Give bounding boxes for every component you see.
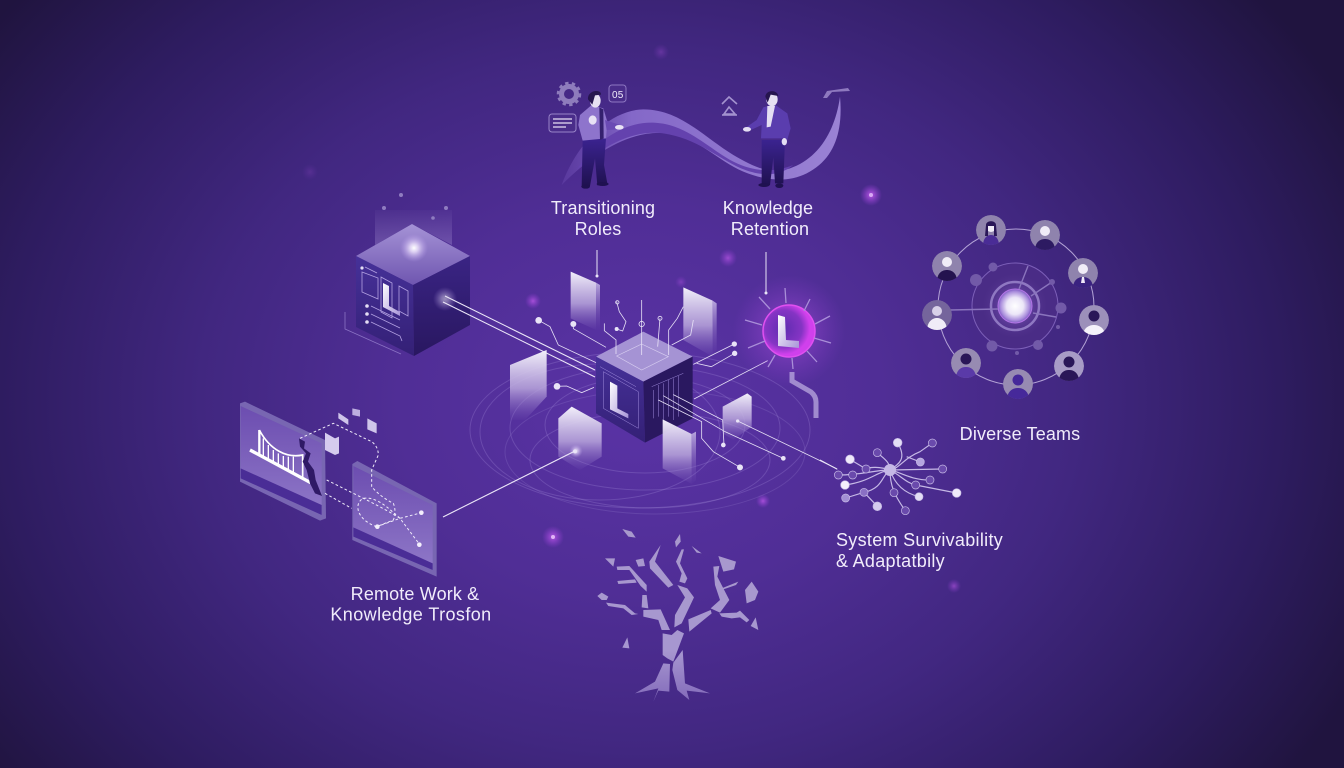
slab: bottom left xyxy=(558,407,602,470)
letter L on central cube xyxy=(610,382,628,418)
heading: Transitioning Roles: Roles xyxy=(575,219,621,239)
central cube faces xyxy=(596,332,693,443)
heading: Remote Work & Knowledge Trosfon: Knowledge Trosfon xyxy=(330,604,492,624)
hub spokes xyxy=(950,266,1056,317)
heading: System Survivability & Adaptatbily: System Survivability xyxy=(836,530,1003,550)
circuit nodes xyxy=(535,301,786,470)
heading: Knowledge Retention: Retention xyxy=(731,219,809,239)
floating data cubes xyxy=(325,408,377,455)
icon: glowing L orb xyxy=(733,275,845,418)
icon: badge 05 xyxy=(609,85,626,102)
person: left figure xyxy=(578,91,624,189)
avatar: left person light xyxy=(922,300,952,331)
heading: Knowledge Retention: Knowledge xyxy=(723,198,813,218)
slab: right xyxy=(723,393,752,440)
network nodes xyxy=(834,438,961,515)
central cube circuits xyxy=(600,367,683,428)
avatar: lower right person xyxy=(1054,351,1084,382)
data nodes xyxy=(375,510,424,547)
cube faces xyxy=(356,224,470,285)
floating glow particles xyxy=(302,44,961,593)
circuit traces xyxy=(539,300,837,469)
panel: system survivability network xyxy=(820,438,961,515)
central hub xyxy=(972,263,1058,349)
team ring xyxy=(938,229,1094,385)
bracket under cube xyxy=(345,312,401,354)
icon: fractured tree xyxy=(597,529,758,702)
dashed links xyxy=(300,423,422,545)
avatar: right upper man xyxy=(1068,258,1098,289)
avatar: bottom person xyxy=(1003,369,1033,400)
avatar: right man white shirt xyxy=(1079,305,1109,336)
swoosh ribbon xyxy=(562,97,841,185)
panel: central isometric cube cluster xyxy=(510,272,837,484)
slab: top left xyxy=(571,272,600,330)
letter L xyxy=(778,315,799,348)
connector lines: left cube to central cube xyxy=(443,296,595,377)
tail from orb xyxy=(792,372,816,418)
circuit board face xyxy=(362,267,408,341)
network branches xyxy=(838,443,957,511)
connector line to network xyxy=(820,460,837,469)
panel: remote work tablets xyxy=(240,402,437,577)
slab: top right xyxy=(683,287,717,357)
heading: Transitioning Roles: Transitioning xyxy=(551,198,655,218)
slab: bottom front xyxy=(663,419,696,484)
heading: System Survivability & Adaptatbily: & Adaptatbily xyxy=(836,551,945,571)
tablet: broken bridge xyxy=(240,402,326,521)
hub satellites xyxy=(970,262,1066,355)
orb rays xyxy=(745,288,831,369)
icon: arrow tip xyxy=(823,88,850,98)
tablet: network map xyxy=(352,461,437,577)
crack xyxy=(299,438,322,496)
concentric ripple rings around central cube xyxy=(470,352,810,514)
heading: Diverse Teams: Diverse Teams xyxy=(960,424,1080,444)
letter L xyxy=(383,283,400,316)
arrow: Knowledge Retention to orb xyxy=(764,252,768,294)
avatar: top right man xyxy=(1030,220,1060,251)
particles above cube xyxy=(382,193,448,220)
icon: document card xyxy=(549,114,576,132)
bridge illustration xyxy=(250,430,311,483)
avatar: top left woman xyxy=(976,215,1006,246)
beam above cube xyxy=(375,210,452,245)
panel: diverse teams ring xyxy=(922,215,1109,400)
icon: badge 05: 05 xyxy=(612,90,624,101)
left isometric cube xyxy=(345,193,470,356)
top glow xyxy=(400,234,428,262)
arrow: Transitioning Roles to slab xyxy=(596,250,598,278)
connector line: tablets to bottom slab xyxy=(443,451,575,517)
heading: Remote Work & Knowledge Trosfon: Remote Work & xyxy=(351,584,479,604)
avatar: upper left man xyxy=(932,251,962,282)
slab: left xyxy=(510,350,547,420)
panel: transitioning roles and knowledge retention figures xyxy=(549,83,850,189)
icon: chevron up xyxy=(722,97,737,115)
person: right figure xyxy=(743,91,791,188)
icon: gear xyxy=(558,83,580,105)
avatar: lower left person xyxy=(951,348,981,379)
